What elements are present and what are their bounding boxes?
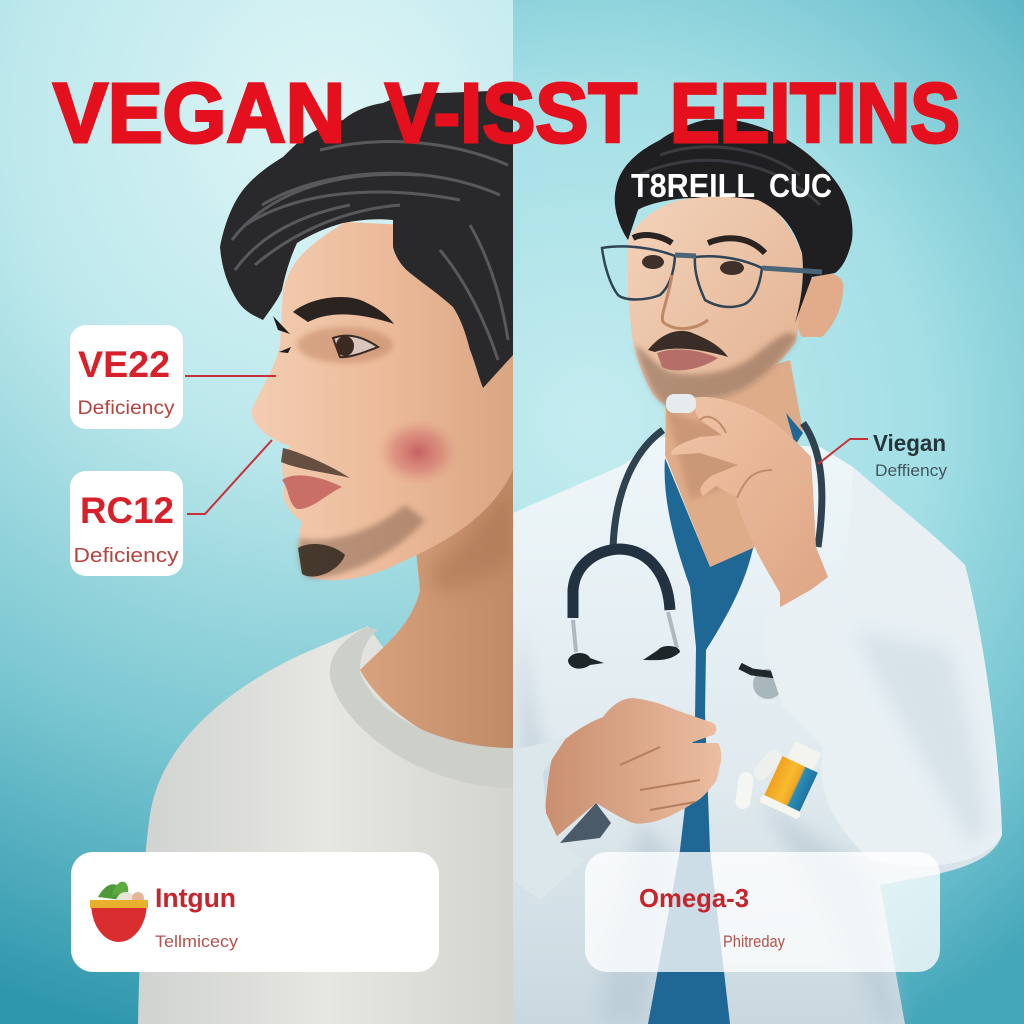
card: Intgun bbox=[71, 852, 439, 972]
coat sleeve bbox=[763, 467, 1002, 866]
eyes bbox=[642, 255, 664, 269]
stethoscope tubes bbox=[613, 423, 822, 548]
eye bbox=[333, 336, 378, 357]
ear bbox=[799, 273, 843, 337]
rash on cheek bbox=[382, 423, 453, 480]
left sleeve cuff bbox=[513, 738, 585, 900]
hair bbox=[615, 119, 853, 323]
eye socket shadow bbox=[297, 327, 393, 363]
face bbox=[628, 196, 808, 407]
stubble bbox=[635, 333, 797, 407]
badge: VE22 Deficiency bbox=[70, 325, 183, 429]
neck bbox=[360, 470, 513, 748]
face bbox=[252, 222, 513, 580]
stethoscope yoke bbox=[573, 549, 670, 618]
badge: VE22 Deficiency: VE22 bbox=[78, 344, 170, 385]
capsule in fingers bbox=[666, 394, 696, 413]
title: EEITINS bbox=[670, 66, 960, 160]
connector: Viegan label bbox=[818, 439, 868, 464]
connector: VE22 to nose bbox=[185, 375, 276, 377]
moustache bbox=[648, 331, 728, 357]
cuff shadow bbox=[560, 803, 611, 843]
subtitle bbox=[631, 167, 832, 204]
hair sheen bbox=[640, 147, 820, 205]
supplement bottle bbox=[759, 738, 828, 820]
icon: food bowl bbox=[90, 882, 148, 942]
coat shading bbox=[520, 620, 900, 1024]
label: Viegan Deffiency: Viegan bbox=[873, 430, 946, 456]
subtitle: CUC bbox=[769, 167, 832, 204]
neck bbox=[665, 360, 803, 567]
label: Viegan Deffiency: Deffiency bbox=[875, 461, 948, 480]
card: Intgun: Tellmicecy bbox=[155, 932, 239, 951]
badge: RC12 Deficiency: Deficiency bbox=[74, 545, 178, 567]
card: Omega-3 bbox=[585, 852, 940, 972]
hair bbox=[220, 90, 513, 388]
lower hand bbox=[545, 698, 721, 837]
stubble bbox=[299, 505, 425, 578]
moustache bbox=[281, 448, 350, 478]
lips bbox=[657, 349, 718, 370]
card: Intgun: Intgun bbox=[155, 883, 236, 913]
hair highlights bbox=[232, 142, 508, 360]
card: Omega-3: Phitreday bbox=[723, 932, 785, 951]
eyebrows bbox=[633, 235, 765, 253]
raised hand with fingers bbox=[671, 397, 828, 613]
subtitle: T8REILL bbox=[631, 167, 755, 204]
goatee bbox=[298, 544, 345, 577]
label: Viegan Deffiency bbox=[873, 430, 948, 480]
illustration: doctor in white coat bbox=[513, 119, 1002, 1024]
title: V-ISST bbox=[385, 66, 637, 160]
badge: RC12 Deficiency bbox=[70, 471, 183, 576]
illustration: young man in profile bbox=[138, 90, 513, 1024]
card: Omega-3: Omega-3 bbox=[639, 883, 749, 913]
background: left panel bbox=[0, 0, 513, 1024]
title: VEGAN bbox=[53, 66, 345, 160]
eyebrow bbox=[293, 297, 394, 324]
badge: VE22 Deficiency: Deficiency bbox=[78, 398, 175, 419]
scrubs bbox=[648, 458, 753, 1024]
background: right panel bbox=[513, 0, 1024, 1024]
connector: RC12 to jaw bbox=[187, 440, 272, 514]
stethoscope chest piece bbox=[753, 669, 779, 699]
nose bbox=[662, 275, 708, 329]
pills bbox=[734, 771, 754, 810]
badge: RC12 Deficiency: RC12 bbox=[80, 490, 174, 531]
coat bbox=[513, 437, 1002, 1024]
glasses bbox=[602, 246, 822, 307]
sweater collar bbox=[330, 627, 513, 788]
stethoscope ear tips bbox=[568, 646, 680, 669]
sweater bbox=[138, 626, 513, 1024]
sleeve shading bbox=[863, 634, 986, 838]
lips bbox=[282, 475, 342, 509]
title bbox=[53, 66, 960, 160]
